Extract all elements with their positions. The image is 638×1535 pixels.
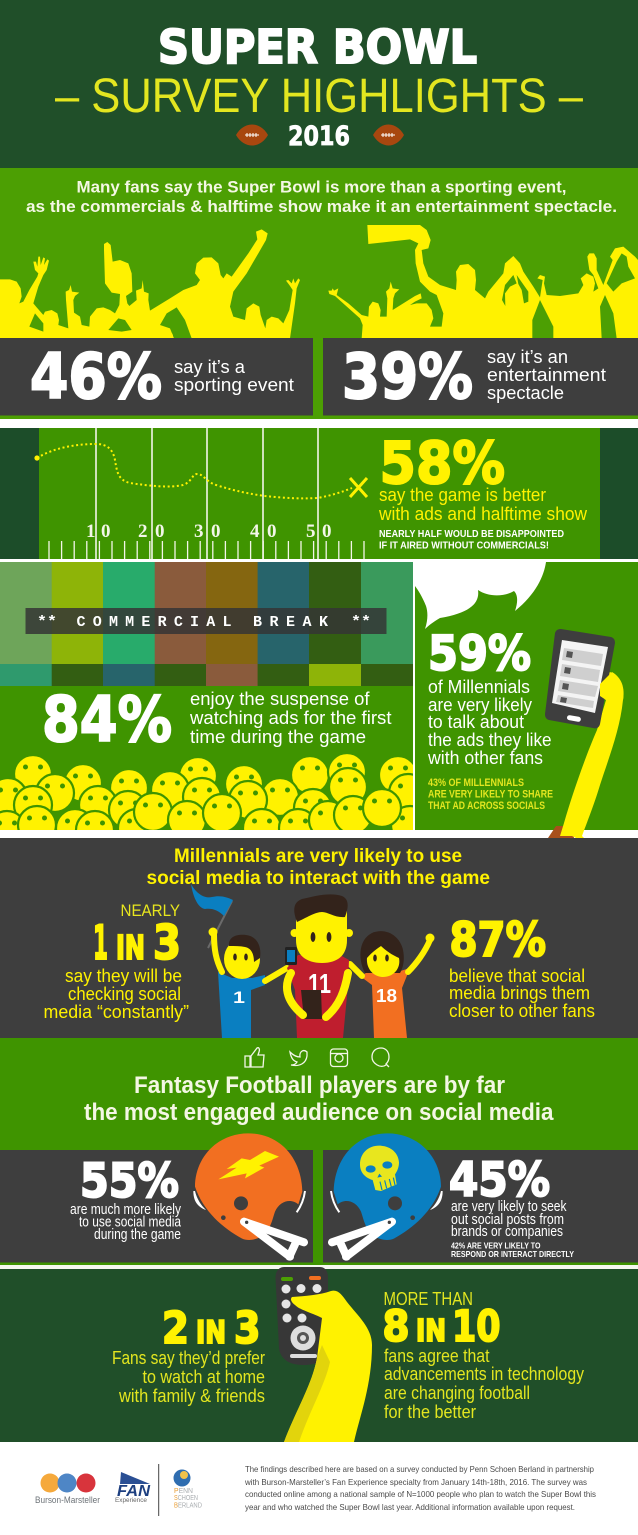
stat: more than 8 in 10: 10	[452, 1302, 500, 1352]
stat: 59%: 59%	[428, 626, 531, 682]
stat panel: 46%: 46%	[30, 340, 162, 413]
panel: watching at home	[0, 1267, 638, 1442]
logo: Fan Experience: FAN	[117, 1483, 150, 1500]
logo: Fan Experience	[115, 1472, 150, 1504]
stat: 87%	[449, 913, 595, 1021]
note text: NEARLY HALF WOULD BE DISAPPOINTED	[379, 528, 564, 540]
stat: 87%: media brings them	[449, 983, 590, 1003]
stat: nearly 1 in 3: 1	[93, 916, 108, 971]
play route arrow	[34, 444, 367, 498]
panel: fantasy football	[0, 1038, 638, 1268]
stat panel: 45%: RESPOND OR INTERACT DIRECTLY	[451, 1249, 574, 1259]
stat: more than 8 in 10: IN	[416, 1314, 446, 1349]
stat panel: 45%: 45%	[449, 1153, 550, 1208]
stat panel: 39%: say it’s an	[487, 347, 568, 367]
stat: more than 8 in 10: MORE THAN	[384, 1289, 473, 1309]
note text: ARE VERY LIKELY TO SHARE	[428, 788, 553, 800]
illustration: crowd left	[0, 229, 300, 341]
note text: IF IT AIRED WITHOUT COMMERCIALS!	[379, 540, 549, 552]
stat: more than 8 in 10: are changing football	[384, 1382, 530, 1403]
illustration: fan with number 18: 18	[376, 986, 397, 1006]
subtitle: – SURVEY HIGHLIGHTS –	[55, 70, 583, 123]
tv colour bars	[0, 562, 413, 686]
panel: millennials social media	[0, 838, 638, 1039]
stat: 2 in 3: Fans say they’d prefer	[112, 1347, 265, 1368]
divider	[158, 1464, 159, 1516]
panel: millennials talk about ads	[415, 562, 638, 838]
logo: Fan Experience: Experience	[115, 1498, 148, 1504]
logo: Penn Schoen Berland: SCHOEN	[174, 1493, 198, 1502]
methodology note: with Burson-Marsteller’s Fan Experience specialty from January 14th-18th, 2016. The survey was	[244, 1478, 587, 1487]
stat panel: 45%: out social posts from	[451, 1212, 564, 1228]
stat: 87%: closer to other fans	[449, 1001, 595, 1021]
stat: 2 in 3: with family & friends	[118, 1385, 265, 1406]
stat text	[378, 485, 588, 524]
logo: Burson-Marsteller	[35, 1474, 100, 1505]
panel: entertainment spectacle intro	[0, 168, 638, 419]
stat panel: 39%: 39%	[342, 340, 473, 413]
stat panel: 45%: are very likely to seek	[451, 1199, 567, 1215]
stat: 2 in 3: to watch at home	[142, 1366, 265, 1387]
stat: nearly 1 in 3: checking social	[68, 984, 181, 1004]
illustration: fan with flag, number 1: 1	[233, 988, 245, 1007]
stat: more than 8 in 10	[382, 1289, 585, 1422]
stat: 87%: 87%	[450, 913, 546, 968]
intro text	[26, 178, 617, 216]
intro text: Many fans say the Super Bowl is more than a sporting event,	[76, 178, 566, 196]
illustration: fan with phone, number 11: 11	[308, 968, 331, 999]
methodology note: conducted online among a national sample of N=1000 people who plan to watch the Super Bowl this	[245, 1490, 596, 1499]
stat panel: 46%: say it’s a	[174, 357, 246, 377]
stat panel: 55%: 55%	[80, 1154, 179, 1209]
stat panel: 39%: entertainment	[487, 365, 606, 385]
yard numbers	[86, 521, 332, 542]
stat panel: 55%: during the game	[94, 1227, 181, 1243]
panel: commercial break	[0, 562, 413, 830]
stat panel: 45%: 42% ARE VERY LIKELY TO	[451, 1240, 541, 1250]
icon: arm holding phone	[545, 629, 624, 838]
stat text	[427, 677, 552, 768]
stat text: of Millennials	[428, 677, 530, 697]
stat text: watching ads for the first	[189, 708, 392, 728]
stat text: say the game is better	[379, 485, 546, 505]
commercial break banner: COMMERCIAL	[76, 614, 232, 631]
icon: blue helmet with skull	[331, 1133, 443, 1257]
icon: orange helmet	[193, 1133, 305, 1257]
panel: football field	[0, 428, 638, 559]
logo: Penn Schoen Berland: BERLAND	[174, 1500, 202, 1510]
stat text: to talk about	[428, 712, 524, 732]
heading: Fantasy Football players are by far	[134, 1072, 505, 1099]
white divider band	[0, 1265, 638, 1269]
illustration: fan with flag, number 1	[191, 884, 287, 1038]
note text	[428, 777, 553, 812]
commercial break banner: **	[351, 614, 371, 631]
intro text: as the commercials & halftime show make it an entertainment spectacle.	[26, 197, 617, 216]
stat panel: 39%: spectacle	[487, 383, 564, 403]
panel: header	[0, 0, 638, 168]
note text: 43% OF MILLENNIALS	[428, 777, 524, 789]
stat panel: 45%	[323, 1150, 638, 1262]
stat text: enjoy the suspense of	[190, 689, 371, 709]
stat text: the ads they like	[428, 730, 552, 750]
stat text: with ads and halftime show	[378, 504, 588, 524]
stat text: time during the game	[190, 727, 366, 747]
icon: thumbs up	[245, 1048, 264, 1067]
yard numbers: 20	[138, 521, 164, 542]
icon: football left	[236, 124, 268, 146]
icon: twitter bird	[290, 1051, 307, 1066]
stat panel: 55%: are much more likely	[70, 1202, 182, 1218]
yard numbers: 30	[194, 521, 220, 542]
stat: nearly 1 in 3: 3	[153, 916, 181, 971]
stat: 84%: 84%	[42, 683, 172, 756]
stat: more than 8 in 10: advancements in technology	[384, 1363, 585, 1384]
stat panel: 45%: brands or companies	[451, 1224, 563, 1240]
illustration: crowd right	[328, 225, 638, 338]
stat: 2 in 3: 3	[234, 1303, 260, 1354]
stat panel: 39%	[323, 338, 638, 416]
yard numbers: 40	[250, 521, 276, 542]
year: 2016	[288, 121, 350, 152]
methodology note	[244, 1465, 596, 1512]
note text	[379, 528, 564, 552]
logo: Burson-Marsteller: Burson-Marsteller	[35, 1495, 100, 1505]
yard numbers: 50	[306, 521, 332, 542]
stat: 87%: believe that social	[449, 966, 585, 986]
stat: nearly 1 in 3: NEARLY	[120, 901, 180, 920]
heading: social media to interact with the game	[146, 868, 490, 889]
stat: 58%: 58%	[380, 429, 505, 497]
logo: Penn Schoen Berland: PENN	[174, 1486, 193, 1495]
stat: nearly 1 in 3: media “constantly”	[44, 1002, 189, 1022]
commercial break banner: BREAK	[253, 614, 328, 631]
stat panel: 46%: sporting event	[174, 375, 294, 395]
title: SUPER BOWL	[158, 20, 477, 74]
stat: nearly 1 in 3: say they will be	[65, 966, 182, 986]
stat: 2 in 3: 2	[162, 1303, 189, 1354]
stat: more than 8 in 10: fans agree that	[384, 1345, 490, 1366]
heading: Millennials are very likely to use	[174, 846, 462, 867]
speech bubble	[415, 562, 546, 629]
panel: footer	[0, 1442, 638, 1535]
stat text	[189, 689, 392, 747]
stat: 2 in 3: IN	[196, 1315, 226, 1351]
commercial break banner	[26, 608, 386, 634]
methodology note: The findings described here are based on a survey conducted by Penn Schoen Berland in partnership	[245, 1465, 594, 1474]
illustration: smiley crowd	[0, 754, 413, 830]
stat: more than 8 in 10: 8	[382, 1302, 410, 1352]
note text: THAT AD ACROSS SOCIALS	[428, 800, 545, 812]
yard numbers: 10	[86, 521, 110, 542]
logo: Penn Schoen Berland	[174, 1470, 202, 1510]
heading	[146, 846, 490, 889]
stat text: with other fans	[427, 748, 543, 768]
icon: football right	[373, 124, 404, 146]
stat panel: 46%	[0, 338, 313, 416]
stat panel: 55%: to use social media	[79, 1214, 182, 1230]
commercial break banner: **	[37, 614, 57, 631]
stat: 2 in 3	[112, 1303, 265, 1406]
illustration: fan with number 18	[350, 931, 434, 1038]
icon: chat bubble	[372, 1048, 389, 1067]
illustration: fan with phone, number 11	[285, 894, 353, 1038]
heading: the most engaged audience on social media	[84, 1099, 554, 1126]
stat text: are very likely	[428, 695, 532, 715]
heading	[84, 1072, 554, 1126]
methodology note: year and who watched the Super Bowl last year. Additional information available upon request.	[245, 1503, 575, 1512]
stat panel: 55%	[0, 1150, 313, 1262]
stat: nearly 1 in 3	[44, 901, 189, 1022]
stat: nearly 1 in 3: IN	[116, 928, 145, 967]
icon: hand holding remote	[276, 1267, 372, 1442]
stat: more than 8 in 10: for the better	[384, 1401, 476, 1422]
icon: instagram	[330, 1049, 348, 1066]
